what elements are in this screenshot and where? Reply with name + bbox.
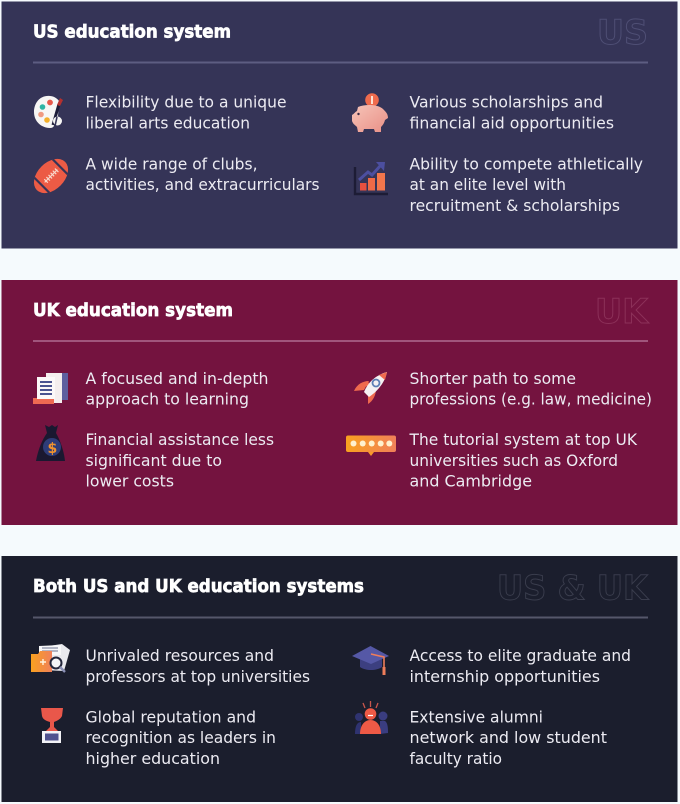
icon: piggy bank (352, 93, 388, 132)
text: financial assistance: lower costs (86, 472, 174, 490)
text: scholarships: Various scholarships and (410, 94, 603, 112)
text: clubs: A wide range of clubs, (86, 156, 258, 174)
text: financial assistance: significant due to (86, 452, 222, 470)
panel: UK education system (2, 280, 678, 525)
text: in-depth (86, 370, 268, 409)
icon: documents (33, 373, 68, 404)
watermark: UK: UK (595, 292, 650, 332)
text: reputation: recognition as leaders in (86, 729, 276, 747)
text: athletics: Ability to compete athletically (410, 156, 643, 174)
icon: trophy (41, 708, 63, 743)
icon: graduation cap (352, 646, 389, 675)
text: scholarships (410, 94, 614, 132)
heading: UK education system: UK education system (33, 300, 233, 321)
text: alumni: Extensive alumni (410, 708, 543, 726)
text: financial assistance (86, 431, 274, 490)
text: tutorial system: universities such as Oxford (410, 452, 618, 470)
icon: paint palette (34, 96, 63, 128)
text: clubs: activities, and extracurriculars (86, 176, 320, 194)
text: reputation (86, 708, 276, 768)
text: flexibility: liberal arts education (86, 114, 250, 132)
icon: growth chart (355, 162, 388, 194)
icon: money bag: $ (48, 441, 57, 457)
text: in-depth: A focused and in-depth (86, 370, 268, 388)
text: tutorial system (409, 431, 638, 490)
text: alumni (410, 708, 607, 768)
text: reputation: higher education (86, 750, 220, 768)
text: financial assistance: Financial assistance less (86, 431, 274, 449)
text: alumni: network and low student (410, 729, 607, 747)
text: scholarships: financial aid opportunities (410, 114, 614, 132)
text: reputation: Global reputation and (86, 708, 256, 726)
text: alumni: faculty ratio (410, 750, 502, 768)
text: shorter path: Shorter path to some (410, 370, 576, 388)
text: shorter path (410, 370, 652, 409)
text: resources (86, 647, 310, 686)
icon: alumni network (355, 701, 388, 734)
icon: star rating (346, 436, 396, 456)
text: resources: professors at top universities (86, 668, 310, 686)
text: athletics: recruitment & scholarships (410, 197, 620, 215)
text: athletics (410, 156, 643, 215)
text: elite graduate: internship opportunities (410, 668, 600, 686)
text: athletics: at an elite level with (410, 176, 566, 194)
text: clubs (86, 156, 320, 194)
text: shorter path: professions (e.g. law, medicine) (410, 391, 652, 409)
heading: US education system: US education system (33, 22, 231, 42)
text: elite graduate: Access to elite graduate and (410, 647, 631, 665)
panel: both US and UK education systems (2, 556, 678, 802)
watermark: US and UK: US & UK (497, 568, 650, 608)
heading: both systems: Both US and UK education systems (33, 576, 364, 597)
text: resources: Unrivaled resources and (86, 647, 274, 665)
text: in-depth: approach to learning (86, 391, 249, 409)
text: tutorial system: The tutorial system at top UK (409, 431, 638, 449)
text: flexibility (86, 94, 286, 132)
text: flexibility: Flexibility due to a unique (86, 94, 286, 112)
panel: US education system (2, 2, 678, 248)
text: elite graduate (410, 647, 631, 686)
icon: money bag (36, 425, 65, 461)
text: tutorial system: and Cambridge (410, 472, 532, 490)
watermark: US: US (597, 13, 648, 53)
icon: rocket (354, 372, 387, 404)
icon: folder and magnifier (31, 644, 70, 672)
icon: american football (27, 152, 75, 200)
